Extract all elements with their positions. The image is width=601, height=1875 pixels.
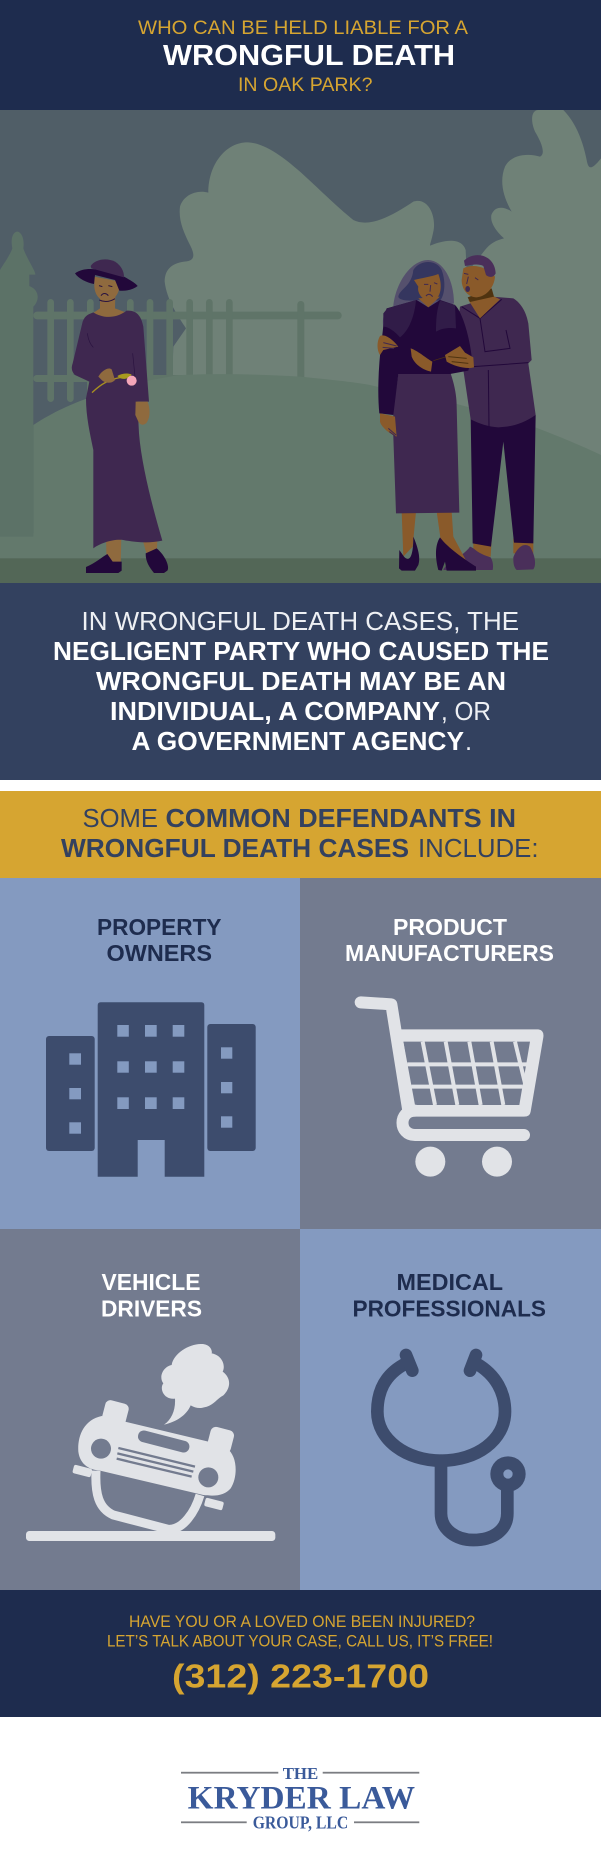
ground strip <box>0 558 601 583</box>
label: medical professionals: MEDICAL <box>396 1269 503 1295</box>
text line 3: WRONGFUL DEATH MAY BE AN <box>96 668 506 696</box>
figure: woman with hat and flower <box>72 259 168 573</box>
call to action text: LET’S TALK ABOUT YOUR CASE, CALL US, IT’S FREE! <box>107 1632 493 1650</box>
icon: overturned car with smoke <box>26 1344 275 1541</box>
label: product manufacturers: MANUFACTURERS <box>345 940 554 966</box>
heading line 1: COMMON DEFENDANTS IN <box>166 805 516 833</box>
label: property owners <box>97 914 222 966</box>
panel: medical professionals <box>300 1229 601 1590</box>
icon: shopping cart <box>361 1002 543 1177</box>
label: product manufacturers <box>345 914 554 966</box>
icon: office buildings <box>46 1002 256 1177</box>
label: medical professionals <box>352 1269 546 1322</box>
call to action text: HAVE YOU OR A LOVED ONE BEEN INJURED? <box>129 1613 475 1631</box>
panel: property owners <box>0 878 300 1229</box>
logo: The Kryder Law Group, LLC <box>181 1764 419 1832</box>
label: vehicle drivers <box>101 1269 202 1322</box>
text line 5: . <box>465 728 472 756</box>
panel: product manufacturers <box>300 878 601 1229</box>
call to action text <box>107 1613 493 1650</box>
figure: grieving woman <box>377 260 476 571</box>
panel: common defendants heading <box>0 791 601 878</box>
footer: call to action <box>0 1590 601 1717</box>
grassy hill <box>0 374 601 583</box>
label: property owners: PROPERTY <box>97 914 222 940</box>
panel: wrongful death explanation <box>0 583 601 780</box>
phone number: (312) 223-1700 <box>172 1658 429 1696</box>
text line 2: NEGLIGENT PARTY WHO CAUSED THE <box>53 638 549 666</box>
text line 4: , OR <box>441 698 491 726</box>
logo: The Kryder Law Group, LLC: KRYDER LAW <box>188 1780 415 1816</box>
icon: stethoscope <box>377 1355 526 1540</box>
logo: The Kryder Law Group, LLC: THE <box>283 1764 318 1783</box>
trees in background <box>165 110 601 533</box>
text line 1: IN WRONGFUL DEATH CASES, THE <box>82 608 519 636</box>
heading line: in Oak Park: IN OAK PARK? <box>238 74 373 96</box>
text line 4: INDIVIDUAL, A COMPANY <box>110 698 440 726</box>
logo: The Kryder Law Group, LLC: GROUP, LLC <box>253 1812 348 1832</box>
heading line: wrongful death: WRONGFUL DEATH <box>163 40 455 72</box>
figure: man comforting <box>443 255 536 570</box>
panel: vehicle drivers <box>0 1229 300 1590</box>
heading line: who can be held liable: WHO CAN BE HELD LIABLE FOR A <box>138 17 468 39</box>
illustration: mourners at a cemetery <box>0 110 601 583</box>
label: property owners: OWNERS <box>106 940 212 966</box>
label: product manufacturers: PRODUCT <box>393 914 507 940</box>
label: medical professionals: PROFESSIONALS <box>352 1296 546 1322</box>
text line 5: A GOVERNMENT AGENCY <box>132 728 464 756</box>
label: vehicle drivers: DRIVERS <box>101 1296 202 1322</box>
heading line 2: INCLUDE: <box>418 835 538 863</box>
label: vehicle drivers: VEHICLE <box>102 1269 200 1295</box>
header: title band <box>0 0 601 110</box>
heading line 2: WRONGFUL DEATH CASES <box>61 835 409 863</box>
heading line 1: SOME <box>82 805 158 833</box>
fence gate post <box>0 232 38 537</box>
cemetery fence <box>33 299 342 404</box>
